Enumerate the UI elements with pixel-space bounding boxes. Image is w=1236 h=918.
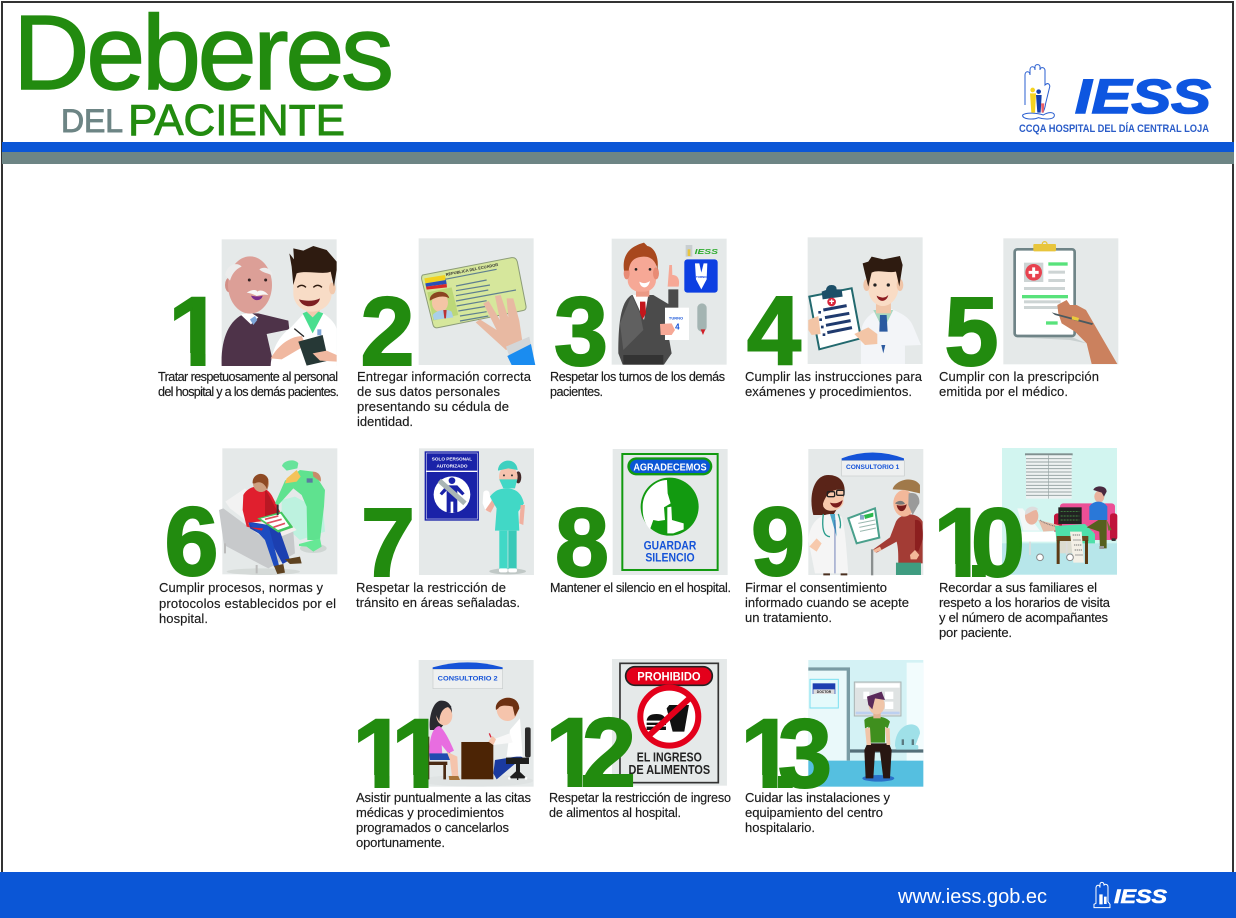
item 5	[939, 238, 1118, 399]
illustration: consultation at desk: CONSULTORIO 2	[438, 676, 498, 683]
text: emitida por el médico.	[939, 384, 1068, 399]
text: Mantener el silencio en el hospital.	[550, 581, 731, 595]
text: del hospital y a los demás pacientes.	[158, 385, 339, 399]
subtitle: DEL: DEL	[61, 103, 123, 139]
item 2	[357, 238, 535, 429]
item 8	[550, 449, 731, 597]
text: médicas y procedimientos	[356, 805, 504, 820]
text: de alimentos al hospital.	[549, 806, 681, 820]
text	[356, 580, 520, 610]
icon: hand with family	[1023, 65, 1054, 119]
illustration: doctor and patient consent	[808, 449, 923, 575]
number 1: 1	[168, 277, 222, 386]
illustration: restricted sign and nurse	[419, 448, 534, 575]
icon: hand logo	[1094, 882, 1110, 908]
number 12: 12	[546, 698, 636, 807]
text: Respetar la restricción de ingreso	[549, 791, 731, 805]
website: www.iess.gob.ec	[897, 886, 1047, 908]
illustration: restricted sign and nurse: SOLO PERSONAL	[432, 457, 472, 462]
illustration: keep silence sign: AGRADECEMOS	[633, 462, 707, 473]
item 10	[934, 448, 1117, 640]
wordmark: IESS: IESS	[1075, 71, 1211, 124]
text	[939, 369, 1099, 399]
item 4	[745, 237, 923, 399]
illustration: keep silence sign: GUARDAR	[644, 538, 697, 552]
illustration: no food sign: DE ALIMENTOS	[628, 762, 710, 777]
illustration: hospital room visit	[1002, 448, 1117, 575]
illustration: man with turn ticket: 4	[675, 322, 680, 331]
illustration: man with turn ticket	[612, 239, 727, 365]
text: hospitalario.	[745, 820, 815, 835]
text	[939, 580, 1111, 640]
subtitle: PACIENTE: PACIENTE	[128, 96, 345, 145]
text: Respetar la restricción de	[356, 580, 506, 595]
text: oportunamente.	[356, 835, 445, 850]
illustration: ID card and hand: REPUBLICA DEL ECUADOR	[445, 262, 499, 277]
number 13: 13	[740, 699, 832, 808]
text: equipamiento del centro	[745, 805, 883, 820]
illustration: restricted sign and nurse: AUTORIZADO	[436, 464, 468, 469]
text: hospital.	[159, 611, 208, 626]
text: Cumplir procesos, normas y	[159, 580, 324, 595]
illustration: keep silence sign	[613, 449, 728, 575]
number 8: 8	[555, 488, 609, 597]
text: Tratar respetuosamente al personal	[158, 370, 338, 384]
illustration: prescription and hand	[1003, 238, 1118, 364]
text: un tratamiento.	[745, 610, 832, 625]
number 6: 6	[164, 487, 218, 596]
illustration: no food sign: PROHIBIDO	[637, 670, 701, 684]
illustration: waiting room: DOCTOR	[817, 690, 832, 694]
header band	[2, 142, 1234, 164]
illustration: no food sign	[612, 659, 727, 786]
item 6	[159, 448, 337, 626]
text: identidad.	[357, 414, 413, 429]
text	[550, 370, 725, 399]
item 7	[356, 448, 534, 610]
text: Respetar los turnos de los demás	[550, 370, 725, 384]
logo: IESS hospital	[1019, 65, 1211, 135]
text	[745, 580, 909, 625]
item 1	[158, 239, 339, 399]
text: Cumplir las instrucciones para	[745, 369, 923, 384]
text: protocolos establecidos por el	[159, 596, 336, 611]
illustration: keep silence sign: SILENCIO	[645, 551, 695, 565]
text: y el número de acompañantes	[939, 610, 1108, 625]
item 9	[745, 449, 923, 625]
text	[158, 370, 339, 399]
text	[549, 791, 731, 820]
text: programados o cancelarlos	[356, 820, 510, 835]
text: pacientes.	[550, 385, 603, 399]
number 7: 7	[361, 488, 415, 597]
number 9: 9	[751, 487, 805, 596]
text: respeto a los horarios de visita	[939, 595, 1111, 610]
illustration: waiting room	[808, 660, 923, 787]
number 5: 5	[944, 277, 998, 386]
footer wordmark: IESS	[1114, 887, 1167, 908]
item 11	[352, 660, 534, 850]
text: Cumplir con la prescripción	[939, 369, 1099, 384]
illustration: doctor with clipboard	[808, 237, 923, 364]
illustration: patient in chair with nurse	[219, 448, 337, 575]
number 10: 10	[934, 488, 1025, 597]
item 12	[546, 659, 731, 820]
text: exámenes y procedimientos.	[745, 384, 912, 399]
text	[745, 790, 890, 835]
number 4: 4	[747, 276, 801, 385]
text	[159, 580, 336, 626]
number 11: 11	[352, 699, 445, 808]
text: presentando su cédula de	[357, 399, 509, 414]
number 3: 3	[554, 277, 608, 386]
illustration: man with turn ticket: TURNO	[696, 275, 707, 279]
text: Asistir puntualmente a las citas	[356, 790, 532, 805]
illustration: old man and doctor	[222, 239, 337, 366]
item 13	[740, 660, 923, 835]
text: Cuidar las instalaciones y	[745, 790, 890, 805]
number 2: 2	[360, 277, 414, 386]
text: Firmar el consentimiento	[745, 580, 887, 595]
text	[356, 790, 532, 850]
text	[745, 369, 923, 399]
illustration: ID card and hand	[419, 238, 535, 365]
text: de sus datos personales	[357, 384, 500, 399]
illustration: man with turn ticket: IESS	[695, 247, 718, 256]
text	[357, 369, 532, 429]
footer band	[0, 872, 1236, 918]
illustration: consultation at desk	[419, 660, 534, 787]
text: Entregar información correcta	[357, 369, 532, 384]
header title	[13, 0, 394, 145]
item 3	[550, 239, 727, 399]
text: Recordar a sus familiares el	[939, 580, 1097, 595]
illustration: doctor and patient consent: CONSULTORIO 1	[846, 465, 900, 471]
illustration: man with turn ticket: TURNO	[669, 315, 683, 320]
illustration: no food sign: EL INGRESO	[637, 750, 702, 765]
text: tránsito en áreas señaladas.	[356, 595, 520, 610]
text: por paciente.	[939, 625, 1012, 640]
text: informado cuando se acepte	[745, 595, 909, 610]
